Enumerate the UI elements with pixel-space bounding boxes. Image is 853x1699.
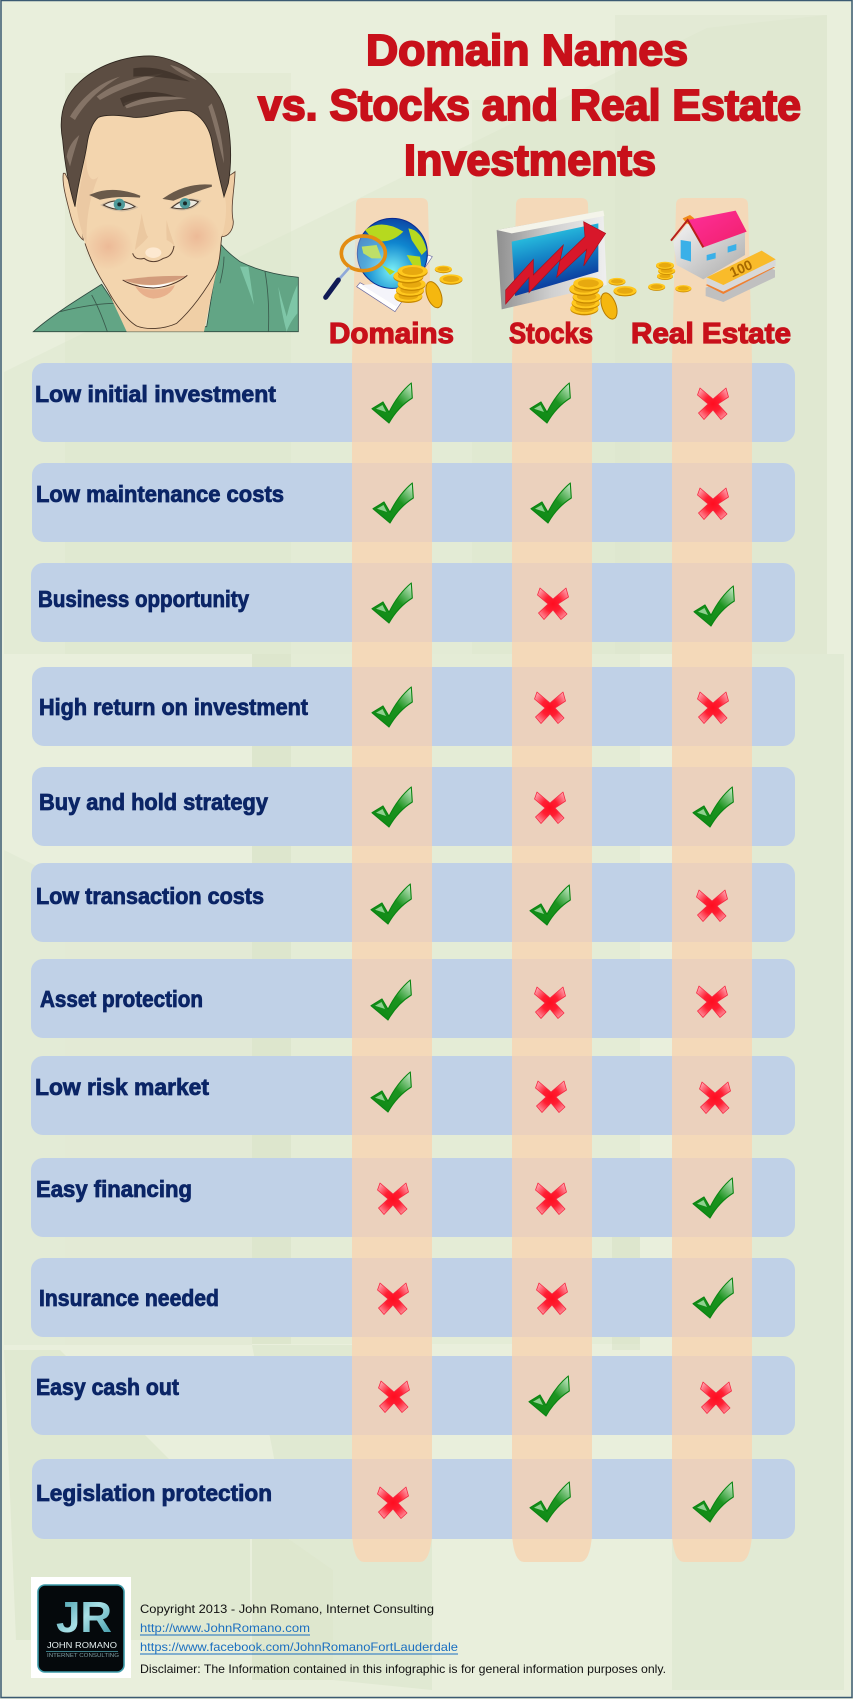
row: High return on investment [32, 667, 795, 746]
row: Asset protection [31, 959, 795, 1038]
column headings: Real Estate [631, 318, 791, 350]
row: Low risk market [31, 1056, 795, 1135]
logo: John Romano Internet Consulting: JR [56, 1593, 112, 1642]
column headings [329, 318, 791, 350]
row: Low maintenance costs: Low maintenance costs [36, 481, 284, 507]
row: Low initial investment: Low initial investment [35, 381, 276, 407]
panel: comparison columns [352, 198, 752, 1562]
row: Low risk market: Low risk market [35, 1074, 209, 1100]
logo: John Romano Internet Consulting [31, 1577, 131, 1678]
row: Buy and hold strategy [32, 767, 795, 846]
icon: real estate house with banknotes and coins: 100 [727, 256, 755, 280]
row: Legislation protection [32, 1459, 795, 1539]
column headings: Domains [329, 318, 454, 350]
row: Easy financing [31, 1158, 795, 1237]
row: Easy financing: Easy financing [36, 1176, 192, 1202]
row: Low maintenance costs [32, 463, 795, 542]
row: Buy and hold strategy: Buy and hold strategy [39, 789, 268, 815]
icon: real estate house with banknotes and coins [648, 211, 776, 302]
icon: domains globe with magnifier and coins [326, 218, 462, 312]
row: Low transaction costs: Low transaction costs [36, 883, 264, 909]
footer text [140, 1602, 666, 1676]
title: Domain Names [366, 26, 688, 75]
row: Easy cash out [31, 1356, 795, 1435]
row: Insurance needed [31, 1258, 795, 1337]
row: Legislation protection: Legislation protection [36, 1480, 272, 1506]
row: Low transaction costs [31, 863, 795, 942]
footer text: Disclaimer: The Information contained in this infographic is for general information purposes only. [140, 1662, 666, 1676]
icon: stocks chart with rising arrow and coins [497, 211, 636, 321]
row: High return on investment: High return on investment [39, 694, 308, 720]
row: Low initial investment [32, 363, 795, 442]
row: Insurance needed: Insurance needed [39, 1285, 219, 1311]
logo: John Romano Internet Consulting: JOHN ROMANO [47, 1641, 117, 1650]
column headings: Stocks [509, 318, 593, 350]
footer text: Copyright 2013 - John Romano, Internet Consulting [140, 1602, 434, 1616]
footer text: http://www.JohnRomano.com [140, 1621, 310, 1635]
footer text: https://www.facebook.com/JohnRomanoFortLauderdale [140, 1640, 458, 1654]
illustration: portrait of John Romano [33, 56, 298, 332]
row: Business opportunity [31, 563, 795, 642]
row: Business opportunity: Business opportunity [38, 586, 249, 612]
title [258, 26, 801, 185]
logo: John Romano Internet Consulting: INTERNET CONSULTING [47, 1653, 119, 1659]
row: Easy cash out: Easy cash out [36, 1374, 179, 1400]
title: Investments [404, 136, 656, 185]
title: vs. Stocks and Real Estate [258, 81, 801, 130]
row: Asset protection: Asset protection [40, 986, 203, 1012]
